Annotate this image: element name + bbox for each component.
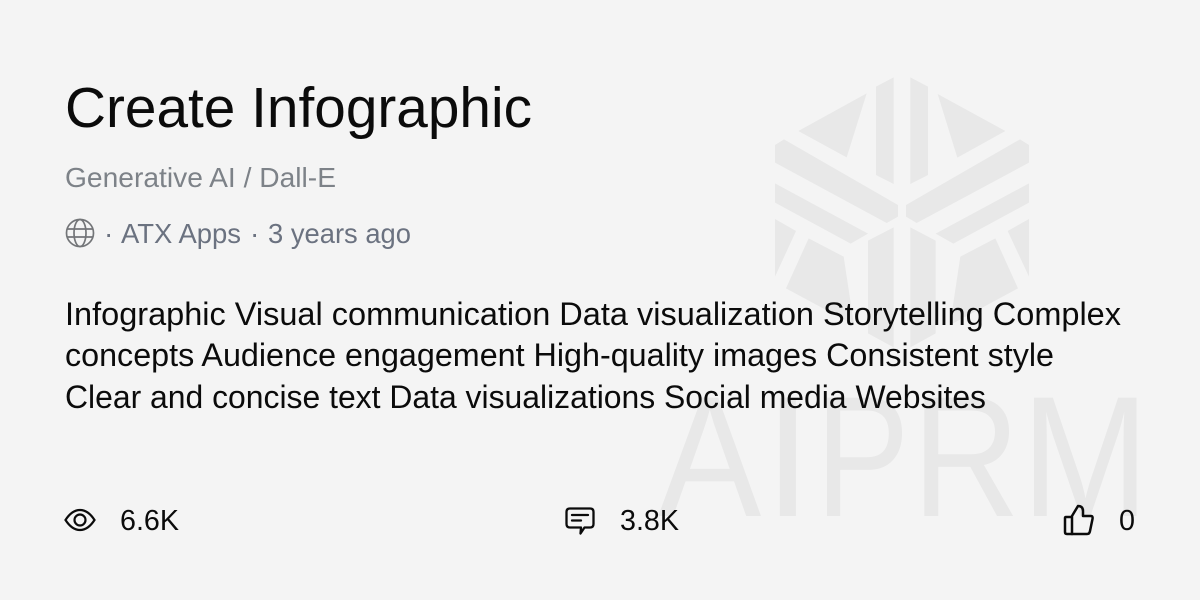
comments count: 3.8K <box>620 505 680 537</box>
watermark wordmark: P <box>815 362 909 553</box>
views count: 6.6K <box>120 505 180 537</box>
subtitle: Generative AI / Dall-E <box>65 162 336 193</box>
meta separator: · <box>250 218 259 249</box>
author: ATX Apps <box>121 218 241 249</box>
watermark wordmark: I <box>764 361 812 553</box>
likes count: 0 <box>1119 505 1135 537</box>
watermark wordmark: A <box>658 360 761 553</box>
description text: Infographic Visual communication Data visualization Storytelling Complex <box>65 296 1121 332</box>
icon: eye <box>66 510 94 530</box>
age: 3 years ago <box>268 218 411 249</box>
watermark wordmark <box>658 360 1149 553</box>
meta separator: · <box>104 218 113 249</box>
icon: globe <box>66 220 94 246</box>
watermark wordmark: M <box>1022 361 1149 553</box>
watermark logo <box>775 77 1029 347</box>
icon: comment <box>566 508 594 534</box>
title: Create Infographic <box>65 76 532 140</box>
description text: concepts Audience engagement High-quality images Consistent style <box>65 337 1054 373</box>
icon: thumbs up <box>1065 506 1093 534</box>
description text <box>65 296 1121 415</box>
watermark wordmark: R <box>912 361 1020 553</box>
description text: Clear and concise text Data visualizations Social media Websites <box>65 379 986 415</box>
